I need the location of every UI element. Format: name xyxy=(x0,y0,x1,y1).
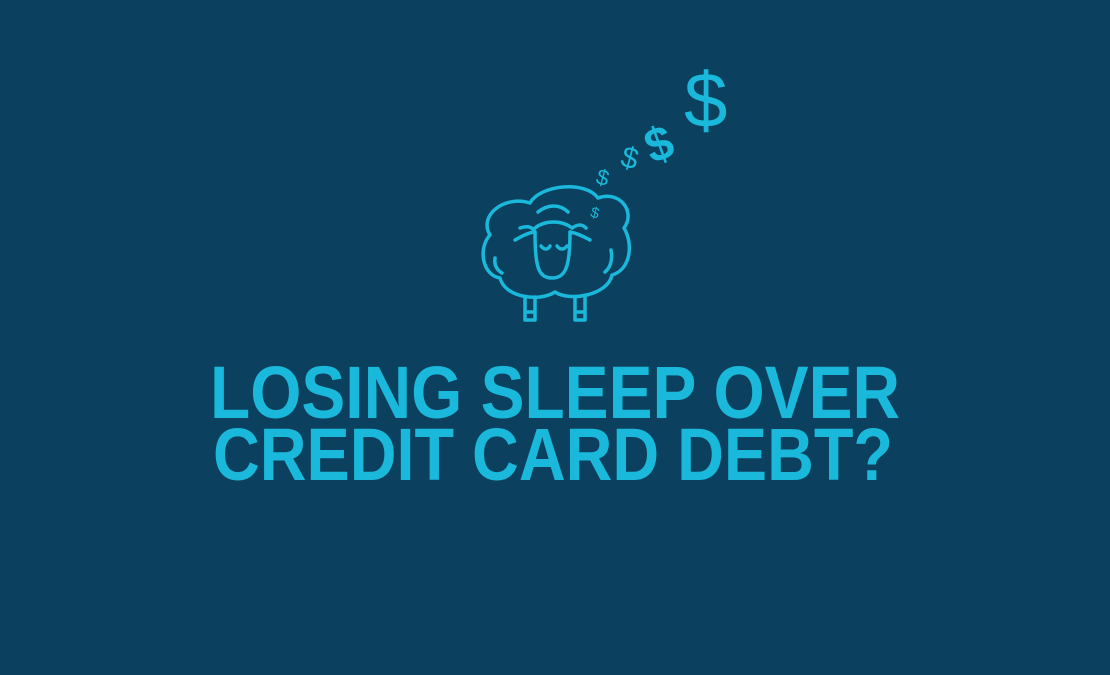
dollar signs: $ xyxy=(684,56,727,144)
dollar signs: $ xyxy=(617,140,642,177)
title: CREDIT CARD DEBT? xyxy=(213,413,893,496)
sheep body cloud xyxy=(483,187,629,297)
dollar signs: $ xyxy=(589,204,602,223)
sheep head xyxy=(495,206,612,278)
sheep legs xyxy=(525,297,535,320)
icon: sleeping sheep xyxy=(483,187,629,320)
title xyxy=(210,351,900,496)
title: LOSING SLEEP OVER xyxy=(210,351,900,434)
dollar signs xyxy=(589,56,727,223)
dollar signs: $ xyxy=(594,164,612,191)
dollar signs: $ xyxy=(638,115,681,174)
